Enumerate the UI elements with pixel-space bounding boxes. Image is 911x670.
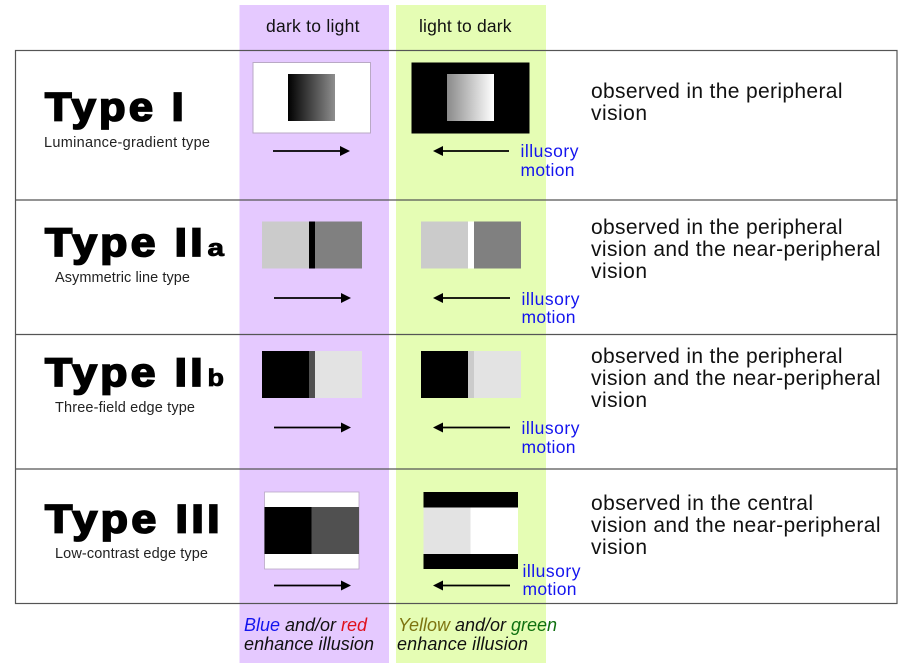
text: where observed: vision [591,102,647,125]
row: Type I [44,62,842,180]
text: where observed [591,492,880,559]
arrow: leftward motion [433,146,509,156]
text: where observed [591,345,880,412]
stimulus: white line between grays [421,222,521,268]
text: where observed: observed in the peripheral [591,345,842,368]
label: illusory motion: motion [522,579,576,599]
note: blue and red enhance illusion: enhance illusion [244,634,374,654]
note: blue and red enhance illusion: Blue and/or red [244,615,368,635]
stimulus: black line between grays [262,222,362,268]
text: where observed [591,216,880,283]
note: yellow and green enhance illusion: Yellow and/or green [398,615,557,635]
table grid [16,50,897,604]
text: where observed: vision and the near-peripheral [591,367,880,390]
text: where observed: observed in the peripheral [591,216,842,239]
label: illusory motion: illusory [522,561,581,581]
note: yellow and green enhance illusion: enhance illusion [397,634,528,654]
label: illusory motion [522,418,580,457]
label: illusory motion [522,561,581,599]
stimulus: low-contrast light [424,492,518,569]
label: illusory motion [522,289,580,327]
panel: light to dark column [396,5,546,663]
text: where observed: vision [591,389,647,412]
subtitle: Asymmetric line type: Asymmetric line type [55,270,190,286]
subtitle: Low-contrast edge type: Low-contrast edge type [55,546,208,562]
label: illusory motion: motion [520,160,574,180]
label: illusory motion: illusory [520,141,579,161]
panel: dark to light column [240,5,389,663]
arrow: leftward motion [433,422,510,432]
text: where observed: vision and the near-peripheral [591,238,880,261]
arrow: rightward motion [273,146,350,156]
text: where observed: observed in the peripheral [591,80,842,103]
title: Type IIa: a [208,235,225,262]
arrow: rightward motion [274,580,351,590]
text: where observed: vision and the near-peripheral [591,514,880,537]
subtitle: Luminance-gradient type: Luminance-gradient type [44,135,210,151]
title: Type IIb: b [208,365,224,392]
row: Type IIa [45,216,880,327]
row: Type IIb [45,345,880,457]
text: where observed: vision [591,536,647,559]
label: illusory motion [520,141,579,180]
heading: light to dark: light to dark [419,16,512,36]
heading: dark to light: dark to light [266,16,360,36]
label: illusory motion: motion [522,307,576,327]
stimulus: three-field light [421,351,521,398]
label: illusory motion: illusory [522,289,580,309]
label: illusory motion: motion [522,437,576,457]
stimulus: low-contrast dark [264,492,359,569]
title: Type IIb: Type II [45,351,206,395]
text: where observed: vision [591,260,647,283]
arrow: leftward motion [433,293,510,303]
note: yellow and green enhance illusion [397,615,557,654]
subtitle: Three-field edge type: Three-field edge type [55,400,195,416]
title: Type I: Type I [45,86,187,130]
stimulus: dark to light gradient [253,62,370,133]
arrow: rightward motion [274,293,351,303]
text: where observed: observed in the central [591,492,813,515]
text: where observed [591,80,842,125]
arrow: leftward motion [433,580,510,590]
title: Type IIa: Type II [45,221,206,265]
row: Type III [45,492,880,599]
stimulus: three-field dark [262,351,362,398]
arrow: rightward motion [274,422,351,432]
title: Type III: Type III [45,498,223,542]
note: blue and red enhance illusion [244,615,374,654]
label: illusory motion: illusory [522,418,580,438]
stimulus: light to dark gradient [412,62,530,134]
